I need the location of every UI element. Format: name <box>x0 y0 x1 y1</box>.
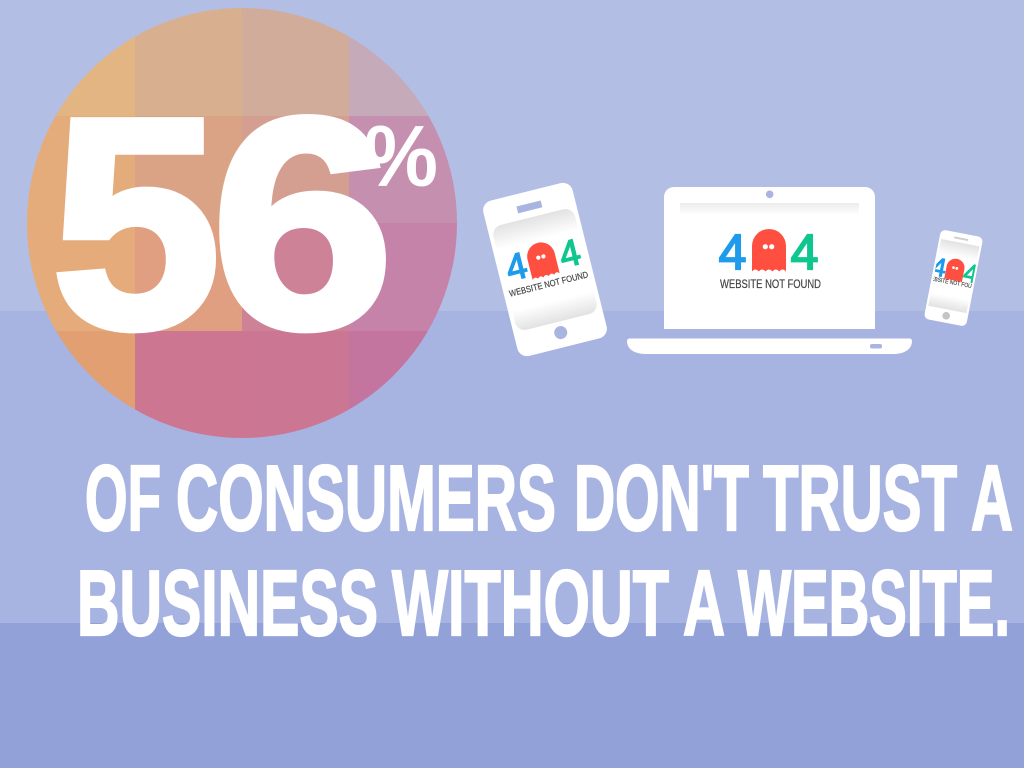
colour grid circle <box>27 8 457 438</box>
phone right with 404 <box>924 230 982 326</box>
number 56 <box>51 55 394 391</box>
headline line 2 <box>77 551 1010 655</box>
headline line 2: BUSINESS <box>77 551 378 655</box>
laptop screen <box>664 187 875 329</box>
404 graphic: WEBSITE NOT FOUND <box>508 269 590 299</box>
number 56: 5 <box>51 55 221 391</box>
laptop screen band <box>680 203 859 215</box>
headline line 1 <box>85 446 1013 550</box>
404 graphic <box>498 230 590 299</box>
headline line 1: DON'T <box>574 446 749 550</box>
laptop 404 graphic: 4 <box>719 224 746 280</box>
headline line 2: A <box>683 551 725 655</box>
laptop 404 graphic <box>719 224 821 291</box>
laptop camera <box>766 190 774 198</box>
phone screen <box>928 239 980 313</box>
number 56: 6 <box>211 55 394 391</box>
phone body <box>924 229 983 327</box>
laptop touchpad notch <box>870 344 882 348</box>
percent sign: % <box>364 109 438 205</box>
phone body <box>481 181 609 358</box>
phone home button <box>553 325 569 340</box>
laptop 404 graphic: 4 <box>791 224 818 280</box>
phone screen <box>491 207 599 332</box>
headline line 1: CONSUMERS <box>176 446 556 550</box>
gradient circle with 56 percent <box>27 8 457 438</box>
headline line 2: WITHOUT <box>392 551 669 655</box>
headline <box>77 446 1013 655</box>
404 graphic: 4 <box>502 244 531 289</box>
laptop with 404 <box>627 187 912 354</box>
phone home button <box>942 311 951 320</box>
phone left with 404 <box>481 181 609 358</box>
clipped 404 graphic: WEBSITE NOT FOUND <box>926 275 980 292</box>
phone speaker <box>954 236 968 241</box>
clipped 404 graphic: 4 <box>929 251 949 283</box>
404 graphic: 4 <box>555 231 585 276</box>
laptop base <box>627 338 912 354</box>
headline line 1: OF <box>85 446 161 550</box>
phone speaker <box>516 200 542 213</box>
clipped 404 graphic <box>933 258 976 288</box>
laptop 404 graphic: WEBSITE NOT FOUND <box>720 279 821 291</box>
clipped 404 graphic: 4 <box>961 257 981 289</box>
